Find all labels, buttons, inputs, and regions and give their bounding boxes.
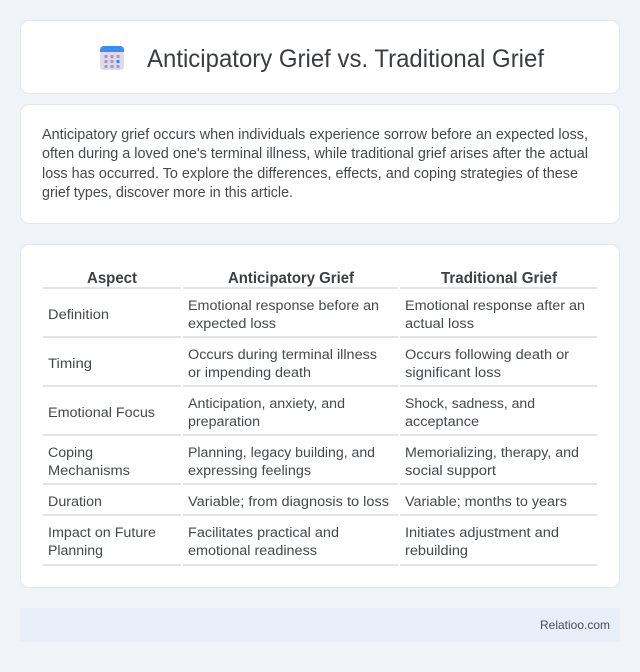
title: Anticipatory Grief vs. Traditional Grief xyxy=(147,45,544,73)
row: coping mechanisms: Coping xyxy=(48,445,93,461)
text block: introduction: often during a loved one's terminal illness, while traditional grief arises after the actual xyxy=(42,146,588,162)
panel: introduction xyxy=(20,104,620,224)
row: definition: Definition xyxy=(48,307,109,323)
row: timing xyxy=(48,347,569,381)
row: duration: Duration xyxy=(48,494,102,510)
table header row: Traditional Grief xyxy=(441,270,558,287)
row: timing: or impending death xyxy=(188,365,311,381)
row: definition: expected loss xyxy=(188,316,276,332)
row: duration xyxy=(48,494,567,510)
text block: introduction: loss has occurred. To explore the differences, effects, and coping strategies of these xyxy=(42,166,578,182)
panel: title card xyxy=(20,20,620,94)
row: definition: actual loss xyxy=(405,316,474,332)
row: coping mechanisms xyxy=(48,445,579,479)
table header row: Anticipatory Grief xyxy=(228,270,355,287)
text block: introduction: grief types, discover more in this article. xyxy=(42,185,293,201)
row: definition: Emotional response after an xyxy=(405,298,585,314)
row: impact on future planning xyxy=(48,525,559,559)
row: duration: Variable; from diagnosis to loss xyxy=(188,494,389,510)
footer text: Relatioo.com xyxy=(540,618,610,632)
row: emotional focus: acceptance xyxy=(405,414,479,430)
text block: introduction xyxy=(42,127,588,201)
row: impact on future planning: Initiates adjustment and xyxy=(405,525,559,541)
row: coping mechanisms: Mechanisms xyxy=(48,463,130,479)
row: emotional focus: Emotional Focus xyxy=(48,405,155,421)
row: coping mechanisms: social support xyxy=(405,463,496,479)
footer xyxy=(20,608,620,642)
row: emotional focus: preparation xyxy=(188,414,260,430)
row: impact on future planning: Facilitates practical and xyxy=(188,525,339,541)
row: timing: significant loss xyxy=(405,365,501,381)
row: duration: Variable; months to years xyxy=(405,494,567,510)
row: impact on future planning: rebuilding xyxy=(405,543,468,559)
row: timing: Timing xyxy=(48,356,92,372)
row: impact on future planning: Impact on Future xyxy=(48,525,156,541)
row: impact on future planning: emotional readiness xyxy=(188,543,317,559)
row: definition: Emotional response before an xyxy=(188,298,379,314)
row: coping mechanisms: Memorializing, therapy, and xyxy=(405,445,579,461)
row: emotional focus xyxy=(48,396,535,430)
table header row: Aspect xyxy=(87,270,137,287)
table header row xyxy=(87,270,558,287)
panel: comparison table xyxy=(20,244,620,588)
row: coping mechanisms: expressing feelings xyxy=(188,463,311,479)
text block: introduction: Anticipatory grief occurs when individuals experience sorrow before an expected loss, xyxy=(42,127,588,143)
row: impact on future planning: Planning xyxy=(48,543,103,559)
row: timing: Occurs during terminal illness xyxy=(188,347,377,363)
row: definition xyxy=(48,298,585,332)
row: timing: Occurs following death or xyxy=(405,347,569,363)
row: coping mechanisms: Planning, legacy building, and xyxy=(188,445,375,461)
row: emotional focus: Shock, sadness, and xyxy=(405,396,535,412)
icon: calendar xyxy=(100,46,124,70)
row: emotional focus: Anticipation, anxiety, and xyxy=(188,396,345,412)
